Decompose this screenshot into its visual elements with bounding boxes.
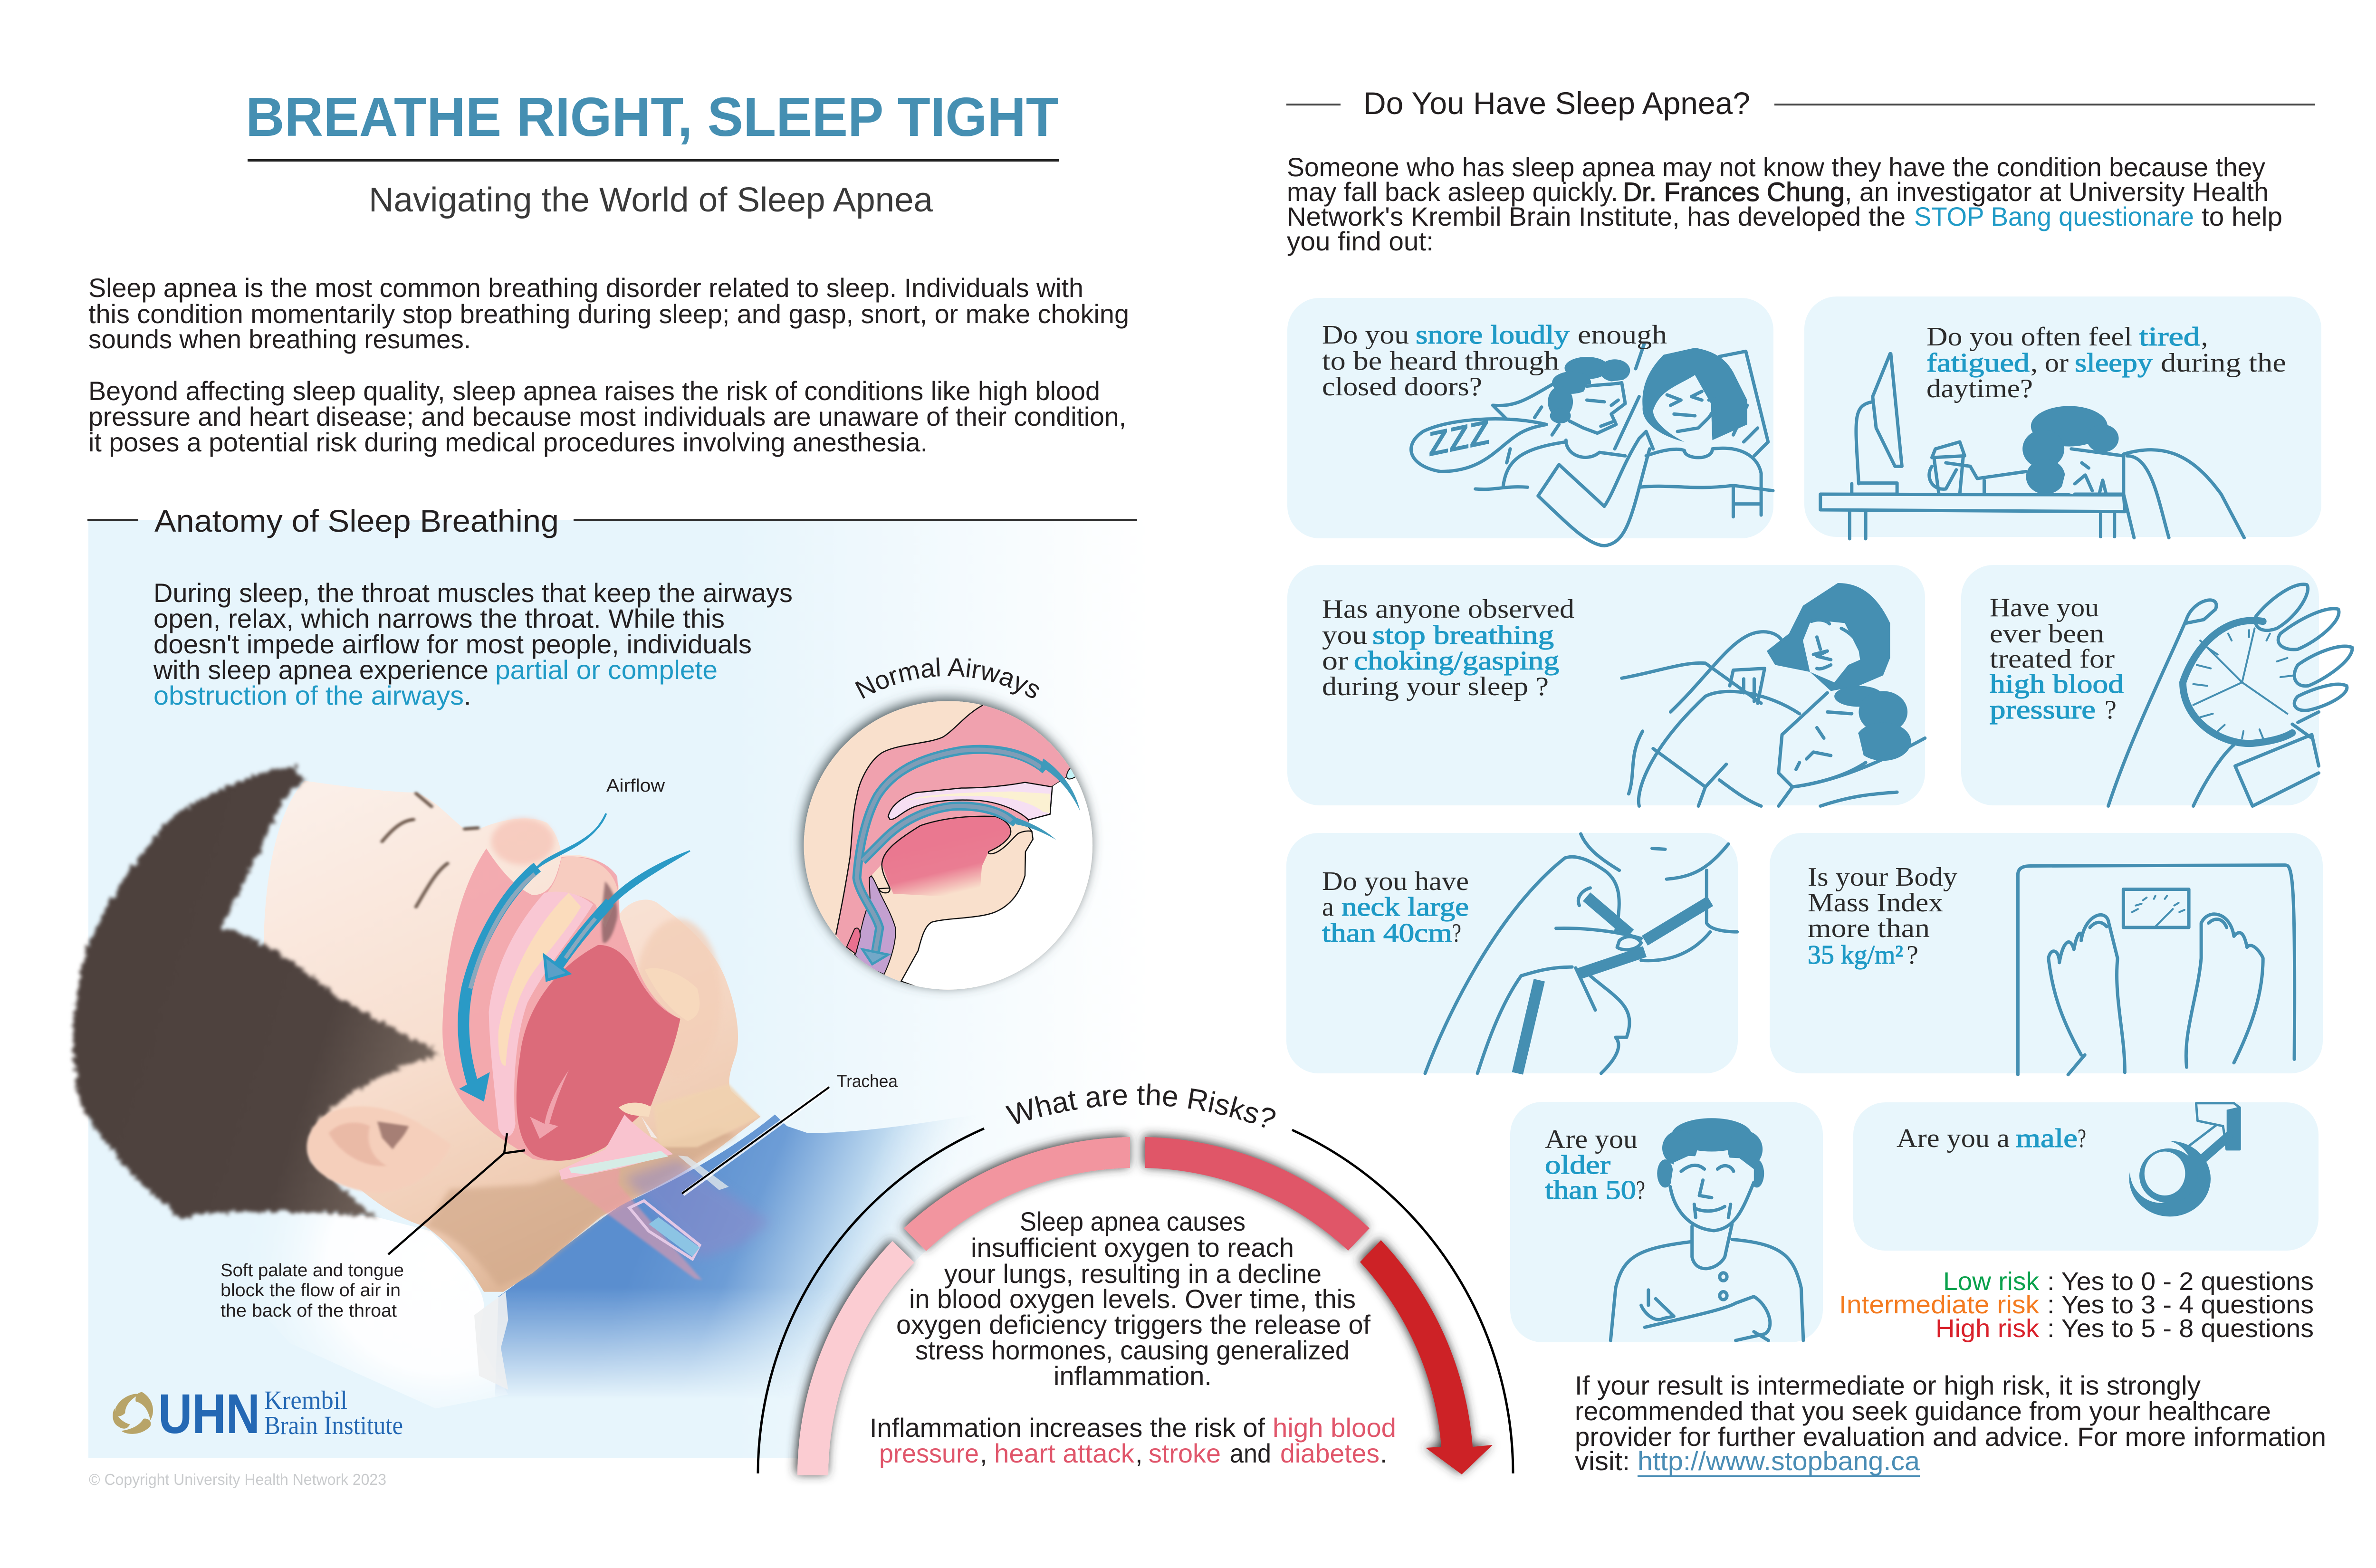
- risk text: insufficient oxygen to reach: [971, 1233, 1294, 1262]
- risk conclusion: .: [1380, 1438, 1388, 1468]
- outside of face: [900, 773, 1092, 990]
- card 1 text: [1322, 320, 1667, 402]
- card 2 text: sleepy: [2075, 348, 2153, 378]
- card 4 text: high blood: [1990, 669, 2124, 699]
- anatomy text: During sleep, the throat muscles that keep the airways: [153, 578, 793, 608]
- advice text: visit:: [1575, 1446, 1630, 1476]
- card 8 text: Are you a: [1897, 1124, 2010, 1153]
- card 3 text: stop breathing: [1372, 621, 1554, 650]
- advice text: recommended that you seek guidance from your healthcare: [1575, 1396, 2271, 1426]
- panel: anatomy background: [88, 520, 1153, 1458]
- card 1 text: enough: [1578, 320, 1667, 350]
- card 4 text: ever been: [1990, 619, 2104, 649]
- logo text: [158, 1383, 403, 1445]
- right intro text: may fall back asleep quickly.: [1287, 177, 1618, 207]
- right intro text: , an investigator at University Health: [1845, 177, 2269, 207]
- snore ZZZ: ZZZ: [1423, 413, 1495, 464]
- risk legend: Low risk: [1943, 1267, 2040, 1296]
- shirt: [495, 1115, 948, 1393]
- inset: normal airways: [803, 700, 1114, 1005]
- card 5 text: Do you have: [1322, 867, 1469, 896]
- card 3 text: or: [1322, 646, 1348, 676]
- icon: male symbol: [2129, 1103, 2240, 1216]
- card 3 text: during your sleep ?: [1322, 672, 1549, 701]
- anatomy text: [153, 578, 793, 710]
- palate: [888, 783, 1052, 820]
- segment 2: [904, 1137, 1130, 1251]
- illustration: sleeping man with blocked airway: [73, 767, 1017, 1436]
- logo emblem: [113, 1392, 153, 1434]
- card 3 text: [1322, 594, 1574, 701]
- risk heading: What are the Risks?: [1004, 1079, 1280, 1137]
- tongue: [517, 945, 680, 1161]
- card 7: older than 50: [1510, 1102, 1823, 1342]
- advice text: If your result is intermediate or high risk, it is strongly: [1575, 1370, 2201, 1400]
- anatomy text: .: [464, 680, 471, 710]
- risk conclusion: [870, 1413, 1396, 1468]
- label: trachea: Trachea: [837, 1071, 898, 1091]
- card 3 text: Has anyone observed: [1322, 594, 1574, 624]
- card 5 text: a: [1322, 892, 1334, 922]
- label: soft palate: the back of the throat: [220, 1301, 397, 1321]
- risk conclusion: ,: [980, 1438, 987, 1468]
- tongue: [882, 816, 1011, 898]
- card 4 text: treated for: [1990, 644, 2115, 674]
- card 6 text: Is your Body: [1808, 862, 1957, 892]
- risk legend: : Yes to 3 - 4 questions: [2047, 1291, 2314, 1319]
- pillow: [179, 1211, 508, 1408]
- intro paragraph 1: sounds when breathing resumes.: [88, 324, 471, 354]
- right heading: Do You Have Sleep Apnea?: [1363, 86, 1750, 121]
- card 6 text: [1808, 862, 1957, 970]
- card 1 text: Do you: [1322, 320, 1409, 350]
- soft palate strip: [489, 892, 593, 1137]
- card 8 text: ?: [2078, 1124, 2086, 1153]
- arch outer line: [758, 1128, 1513, 1473]
- arrow: airflow through nose: [462, 813, 606, 1100]
- epiglottis channel: [854, 877, 896, 975]
- icon: tired person at desk: [1820, 354, 2244, 539]
- risk text: inflammation.: [1054, 1361, 1212, 1391]
- card 2 text: daytime?: [1926, 374, 2033, 403]
- advice text: provider for further evaluation and advice. For more information: [1575, 1422, 2326, 1452]
- logo text: UHN: [158, 1383, 260, 1445]
- card 6 text: 35 kg/m²: [1808, 940, 1903, 970]
- title rule: [248, 159, 1059, 162]
- card 5 text: than 40cm: [1322, 918, 1452, 948]
- intro paragraph 2: [88, 376, 1126, 457]
- card 2: tired: [1804, 296, 2321, 539]
- card 2 text: tired: [2139, 322, 2200, 352]
- icon: neck tape measure: [1425, 834, 1737, 1073]
- card 2 text: [1926, 322, 2286, 403]
- throat pink region: [442, 849, 680, 1161]
- risk text: your lungs, resulting in a decline: [944, 1259, 1322, 1289]
- risk conclusion: pressure: [879, 1438, 979, 1468]
- card 6 text: more than: [1808, 914, 1930, 943]
- anatomy text: open, relax, which narrows the throat. While this: [153, 603, 725, 633]
- inset title: Normal Airways: [851, 652, 1046, 705]
- nose and cheek tones: [491, 818, 554, 865]
- risk legend: [1839, 1267, 2314, 1343]
- icon: hand with stopwatch: [2108, 584, 2352, 806]
- risk conclusion: diabetes: [1280, 1438, 1380, 1468]
- icon: snoring couple: [1411, 344, 1773, 546]
- intro paragraph 2: pressure and heart disease; and because most individuals are unaware of their condition,: [88, 402, 1126, 431]
- card 4 text: [1990, 593, 2124, 725]
- icon: worried partner: [1622, 583, 1925, 806]
- neck shadow: [426, 1128, 736, 1287]
- logo text: Krembil: [264, 1386, 347, 1415]
- nasal cavity and pharynx: [836, 705, 1080, 955]
- card 5 text: ?: [1452, 918, 1461, 948]
- airway arrows: [857, 749, 1045, 955]
- shirt collar: [474, 1292, 508, 1390]
- risk legend: : Yes to 0 - 2 questions: [2047, 1267, 2314, 1296]
- card 3: stop breathing: [1287, 565, 1925, 806]
- intro paragraph 1: [88, 273, 1129, 354]
- risk arch: [758, 1128, 1513, 1475]
- leader: soft palate: [388, 1133, 525, 1254]
- card 8: male: [1853, 1102, 2319, 1251]
- anatomy heading: Anatomy of Sleep Breathing: [154, 503, 559, 538]
- card 6 text: Mass Index: [1808, 888, 1943, 918]
- card 4 text: Have you: [1990, 593, 2099, 622]
- intro paragraph 2: Beyond affecting sleep quality, sleep apnea raises the risk of conditions like high blood: [88, 376, 1100, 406]
- intro paragraph 2: it poses a potential risk during medical procedures involving anesthesia.: [88, 427, 928, 457]
- leader: trachea: [682, 1087, 829, 1194]
- eye tip: [1067, 767, 1077, 779]
- chin highlight: [645, 968, 699, 1021]
- anatomy text: doesn't impede airflow for most people, individuals: [153, 629, 752, 659]
- card 1 text: snore loudly: [1416, 320, 1570, 350]
- ear: [307, 1107, 451, 1193]
- arrow: airflow through mouth: [545, 851, 690, 980]
- card 2 text: , or: [2031, 348, 2069, 378]
- chin tone: [634, 918, 721, 1077]
- risk conclusion: and: [1230, 1438, 1271, 1468]
- head skin: [264, 781, 760, 1292]
- card 5: neck size: [1286, 833, 1738, 1073]
- neck fold: [654, 1084, 760, 1147]
- risk conclusion: heart attack: [994, 1438, 1135, 1468]
- card 7 text: Are you: [1545, 1125, 1638, 1154]
- card 5 text: neck large: [1341, 892, 1469, 922]
- card 4: blood pressure: [1961, 565, 2352, 806]
- card 4 text: pressure: [1990, 695, 2096, 725]
- card 6: BMI: [1770, 833, 2323, 1075]
- title: BREATHE RIGHT, SLEEP TIGHT: [246, 86, 1059, 148]
- risk conclusion: stroke: [1149, 1438, 1221, 1468]
- risk legend: Intermediate risk: [1839, 1291, 2040, 1319]
- right intro text: [1287, 152, 2282, 256]
- risk legend: : Yes to 5 - 8 questions: [2047, 1314, 2314, 1343]
- card 1 text: closed doors?: [1322, 372, 1482, 402]
- anatomy heading: [87, 503, 1137, 538]
- ghost arrow: [530, 1070, 569, 1139]
- risk conclusion: ,: [1135, 1438, 1143, 1468]
- card 2 text: ,: [2201, 322, 2208, 352]
- right intro text: Dr. Frances Chung: [1623, 177, 1845, 207]
- card 7 text: ?: [1636, 1176, 1645, 1205]
- label: soft palate: block the flow of air in: [220, 1281, 401, 1300]
- intro paragraph 1: Sleep apnea is the most common breathing disorder related to sleep. Individuals with: [88, 273, 1083, 303]
- anatomy text: obstruction of the airways: [153, 680, 464, 710]
- upper lip: [547, 857, 619, 928]
- right intro text: you find out:: [1287, 226, 1434, 256]
- risk conclusion: Inflammation increases the risk of: [870, 1413, 1265, 1443]
- card 1: snoring: [1287, 298, 1773, 546]
- label: soft palate: [220, 1261, 404, 1321]
- risk text: oxygen deficiency triggers the release of: [896, 1310, 1370, 1339]
- card 8 text: [1897, 1124, 2086, 1153]
- arch inner fill: [828, 1168, 1443, 1475]
- copyright: © Copyright University Health Network 2023: [89, 1471, 386, 1488]
- anatomy text: partial or complete: [495, 655, 718, 685]
- card 7 text: [1545, 1125, 1645, 1205]
- palate bone: [498, 893, 581, 1066]
- card 7 text: older: [1545, 1150, 1610, 1180]
- mouth: [602, 881, 617, 943]
- right heading: [1286, 86, 2315, 121]
- risk conclusion: high blood: [1273, 1413, 1396, 1443]
- beige tissue: [803, 700, 1093, 991]
- face features: [382, 794, 478, 907]
- card 7 text: than 50: [1545, 1176, 1636, 1205]
- card 4 text: ?: [2105, 695, 2117, 725]
- label: airflow: Airflow: [606, 776, 665, 796]
- right intro text: STOP Bang questionare: [1914, 201, 2194, 231]
- card 2 text: Do you often feel: [1926, 322, 2132, 352]
- card 8 text: male: [2016, 1124, 2078, 1153]
- card 2 text: during the: [2161, 348, 2286, 378]
- card 3 text: choking/gasping: [1354, 646, 1559, 676]
- risk text: stress hormones, causing generalized: [915, 1335, 1350, 1365]
- card 2 text: fatigued: [1926, 348, 2030, 378]
- risk text: Sleep apnea causes: [1020, 1206, 1245, 1236]
- segment 3: [1145, 1137, 1370, 1251]
- card 5 text: [1322, 867, 1469, 948]
- subtitle: Navigating the World of Sleep Apnea: [369, 181, 933, 219]
- risk legend: High risk: [1935, 1314, 2040, 1343]
- card 3 text: you: [1322, 621, 1367, 650]
- right intro text: Someone who has sleep apnea may not know they have the condition because they: [1287, 152, 2265, 182]
- icon: older man: [1610, 1118, 1803, 1340]
- segment 4 arrow: [1360, 1240, 1493, 1474]
- intro paragraph 1: this condition momentarily stop breathing during sleep; and gasp, snort, or make choking: [88, 299, 1129, 329]
- larynx and trachea: [559, 1103, 770, 1280]
- risk text: in blood oxygen levels. Over time, this: [909, 1284, 1356, 1314]
- risk text: [896, 1206, 1370, 1391]
- segment 1: [797, 1241, 914, 1475]
- right intro text: Network's Krembil Brain Institute, has developed the: [1287, 201, 1906, 231]
- card 6 text: ?: [1907, 940, 1918, 970]
- card 1 text: to be heard through: [1322, 346, 1559, 376]
- right intro text: to help: [2202, 201, 2282, 231]
- advice text: http://www.stopbang.ca: [1638, 1446, 1920, 1476]
- icon: feet on scale: [2018, 865, 2295, 1075]
- anatomy text: with sleep apnea experience: [153, 655, 489, 685]
- logo text: Brain Institute: [264, 1411, 403, 1440]
- label: soft palate: Soft palate and tongue: [220, 1261, 404, 1281]
- advice text: [1575, 1370, 2326, 1477]
- hair: [73, 767, 441, 1219]
